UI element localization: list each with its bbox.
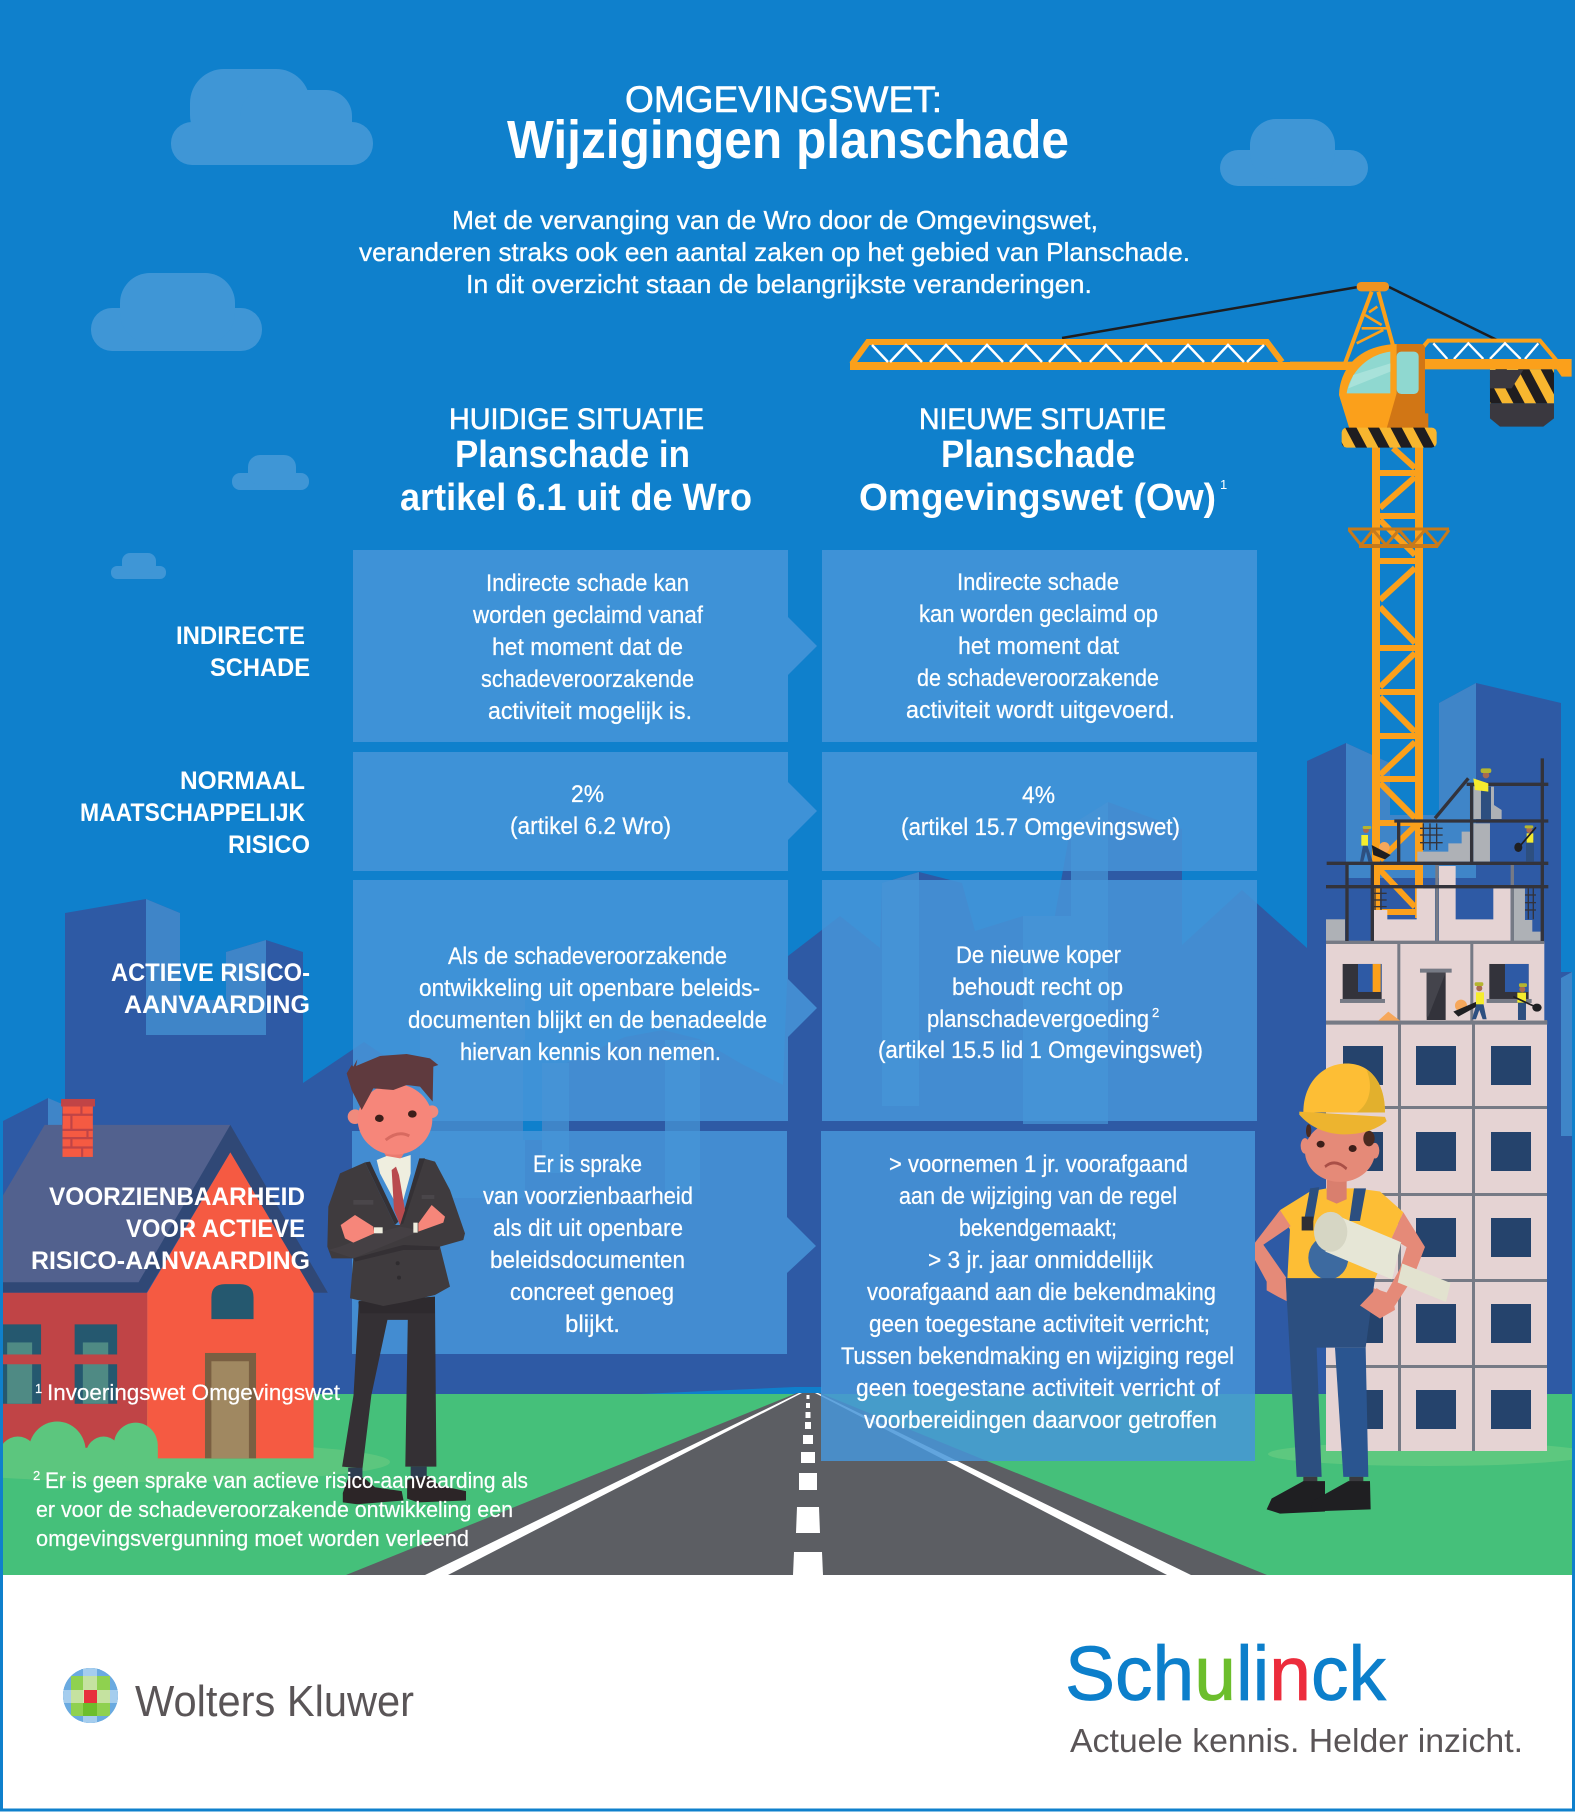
footnote 1: Invoeringswet Omgevingswet [47,1380,340,1405]
regular floors [1326,1020,1547,1451]
text: voorzienbaarheid, huidige situatie: beleidsdocumenten [490,1247,685,1274]
text: actieve risico-aanvaarding, nieuwe situatie [878,942,1203,1064]
logo: Wolters Kluwer [63,1668,414,1726]
text: voorzienbaarheid, nieuwe situatie: aan de wijziging van de regel [899,1183,1177,1210]
column heading: huidige situatie: Planschade in [455,434,690,476]
comparison panels [352,550,1257,1461]
row label: voorzienbaarheid: VOOR ACTIEVE [126,1215,305,1243]
worker with shovel, top right [1514,825,1536,862]
text: actieve risico-aanvaarding, huidige situatie: ontwikkeling uit openbare beleids- [419,975,760,1002]
construction worker [1255,1064,1448,1514]
crane platform [1348,529,1449,546]
intro text: veranderen straks ook een aantal zaken op het gebied van Planschade. [359,237,1190,267]
row label: indirecte schade [176,622,310,682]
text: normaal risico, nieuwe situatie: (artikel 15.7 Omgevingswet) [901,814,1180,841]
text: indirecte schade, huidige situatie: schadeveroorzakende [481,666,694,693]
worker on top floor [1473,768,1491,819]
panel: normaal maatschappelijk risico, huidige situatie [353,752,817,871]
row label: normaal maatschappelijk risico: RISICO [228,831,310,859]
row label: normaal maatschappelijk risico [80,767,310,859]
intro text [359,205,1190,299]
tower crane [850,282,1572,918]
row label: actieve risico-aanvaarding: AANVAARDING [124,991,310,1019]
logo: Schulinck [1065,1631,1523,1759]
text: actieve risico-aanvaarding, huidige situatie: Als de schadeveroorzakende [448,943,727,970]
text: voorzienbaarheid, nieuwe situatie: geen toegestane activiteit verricht; [869,1311,1210,1338]
torso and head [327,1054,465,1313]
crane cab and counterweight [1290,282,1572,448]
upper floors and scaffolding [1326,758,1548,1025]
intro text: Met de vervanging van de Wro door de Omgevingswet, [452,205,1098,235]
footnote 2: omgevingsvergunning moet worden verleend [36,1526,469,1551]
row label: voorzienbaarheid: VOORZIENBAARHEID [49,1183,305,1211]
man in suit [327,1054,466,1504]
text: indirecte schade, nieuwe situatie [906,569,1175,724]
worker with wheelbarrow, lower floor [1453,982,1487,1019]
text: actieve risico-aanvaarding, nieuwe situatie: 2 [1152,1005,1159,1020]
text: actieve risico-aanvaarding, huidige situatie [408,943,767,1066]
panel: indirecte schade, nieuwe situatie [822,550,1257,742]
column heading: nieuwe situatie [859,403,1227,519]
text: indirecte schade, nieuwe situatie: kan worden geclaimd op [919,601,1158,628]
icon: Wolters Kluwer globe [63,1668,118,1723]
footnote 2 [33,1468,528,1551]
text: voorzienbaarheid, nieuwe situatie: bekendgemaakt; [959,1215,1117,1242]
column heading: huidige situatie [400,403,752,519]
panel: voorzienbaarheid, nieuwe situatie [821,1131,1255,1461]
text: voorzienbaarheid, nieuwe situatie: > voornemen 1 jr. voorafgaand [889,1151,1188,1178]
text: actieve risico-aanvaarding, nieuwe situatie: (artikel 15.5 lid 1 Omgevingswet) [878,1037,1203,1064]
text: voorzienbaarheid, huidige situatie: van voorzienbaarheid [483,1183,693,1210]
text: indirecte schade, nieuwe situatie: het moment dat [958,633,1119,660]
row label: voorzienbaarheid [31,1183,310,1275]
row label: actieve risico-aanvaarding [111,959,310,1019]
text: indirecte schade, nieuwe situatie: de schadeveroorzakende [917,665,1159,692]
panel: voorzienbaarheid, huidige situatie [352,1131,816,1354]
text: normaal risico, huidige situatie [510,781,671,840]
text: voorzienbaarheid, nieuwe situatie: geen toegestane activiteit verricht of [856,1375,1220,1402]
clouds [91,69,1368,579]
text: normaal risico, huidige situatie: 2% [571,781,604,808]
row label: normaal maatschappelijk risico: MAATSCHAPPELIJK [80,799,305,827]
title: Wijzigingen planschade [507,110,1069,170]
text: voorzienbaarheid, huidige situatie: blijkt. [565,1311,620,1338]
panel: actieve risico-aanvaarding, huidige situatie [353,880,817,1121]
text: indirecte schade, nieuwe situatie: activiteit wordt uitgevoerd. [906,697,1175,724]
text: voorzienbaarheid, nieuwe situatie: voorafgaand aan die bekendmaking [867,1279,1216,1306]
logo: Schulinck: Actuele kennis. Helder inzicht. [1070,1722,1523,1759]
column heading: nieuwe situatie: Omgevingswet (Ow) [859,477,1216,519]
text: normaal risico, nieuwe situatie [901,782,1180,841]
title [507,79,1069,170]
text: indirecte schade, huidige situatie: het moment dat de [492,634,683,661]
row label: indirecte schade: INDIRECTE [176,622,305,650]
text: actieve risico-aanvaarding, nieuwe situatie: behoudt recht op [952,974,1123,1001]
panel: indirecte schade, huidige situatie [353,550,817,742]
row label: normaal maatschappelijk risico: NORMAAL [180,767,305,795]
text: actieve risico-aanvaarding, nieuwe situatie: planschadevergoeding [927,1006,1149,1033]
worker with shovel, lower floor [1513,983,1542,1020]
row label: actieve risico-aanvaarding: ACTIEVE RISICO- [111,959,310,987]
text: normaal risico, nieuwe situatie: 4% [1022,782,1055,809]
text: indirecte schade, nieuwe situatie: Indirecte schade [957,569,1119,596]
trousers and shoes [342,1297,466,1504]
house [0,1099,328,1482]
footer background [0,1575,1575,1812]
ground [0,1394,1575,1575]
crane cables [1062,287,1497,340]
intro text: In dit overzicht staan de belangrijkste veranderingen. [466,269,1092,299]
footnote 2: Er is geen sprake van actieve risico-aanvaarding als [45,1468,528,1493]
row label: voorzienbaarheid: RISICO-AANVAARDING [31,1247,310,1275]
panel: actieve risico-aanvaarding, nieuwe situatie [822,880,1257,1121]
text: voorzienbaarheid, nieuwe situatie: Tussen bekendmaking en wijziging regel [841,1343,1234,1370]
text: normaal risico, huidige situatie: (artikel 6.2 Wro) [510,813,671,840]
road [346,1387,1267,1575]
column heading: nieuwe situatie: Planschade [941,434,1135,476]
footnote 2: 2 [33,1468,40,1483]
text: actieve risico-aanvaarding, nieuwe situatie: De nieuwe koper [956,942,1121,969]
footnote 2: er voor de schadeveroorzakende ontwikkeling een [36,1497,513,1522]
footnote 1: 1 [35,1381,42,1396]
worker with wheelbarrow, top left [1360,826,1391,862]
title: OMGEVINGSWET: [625,79,942,120]
text: indirecte schade, huidige situatie: worden geclaimd vanaf [472,602,703,629]
text: voorzienbaarheid, nieuwe situatie: > 3 jr. jaar onmiddellijk [928,1247,1154,1274]
crane mast [1375,446,1420,918]
text: actieve risico-aanvaarding, huidige situatie: documenten blijkt en de benadeelde [408,1007,767,1034]
column heading: huidige situatie: HUIDIGE SITUATIE [449,403,704,436]
text: voorzienbaarheid, huidige situatie: Er is sprake [533,1151,642,1178]
text: indirecte schade, huidige situatie [472,570,703,725]
column heading: nieuwe situatie: NIEUWE SITUATIE [919,403,1166,436]
crane left jib [850,342,1350,370]
text: indirecte schade, huidige situatie: activiteit mogelijk is. [488,698,692,725]
text: voorzienbaarheid, huidige situatie: concreet genoeg [510,1279,674,1306]
text: indirecte schade, huidige situatie: Indirecte schade kan [486,570,689,597]
logo: Wolters Kluwer: Wolters Kluwer [135,1677,414,1726]
panel: normaal maatschappelijk risico, nieuwe situatie [822,752,1257,871]
text: voorzienbaarheid, huidige situatie [483,1151,693,1338]
text: voorzienbaarheid, nieuwe situatie [841,1151,1234,1434]
row label: indirecte schade: SCHADE [210,654,310,682]
logo: Schulinck: Schulinck [1065,1631,1386,1717]
text: voorzienbaarheid, nieuwe situatie: voorbereidingen daarvoor getroffen [864,1407,1217,1434]
text: actieve risico-aanvaarding, huidige situatie: hiervan kennis kon nemen. [460,1039,721,1066]
building [1326,758,1548,1451]
text: voorzienbaarheid, huidige situatie: als dit uit openbare [493,1215,683,1242]
city skyline [3,683,1572,1400]
column heading: huidige situatie: artikel 6.1 uit de Wro [400,477,752,519]
column heading: nieuwe situatie: 1 [1220,477,1227,492]
